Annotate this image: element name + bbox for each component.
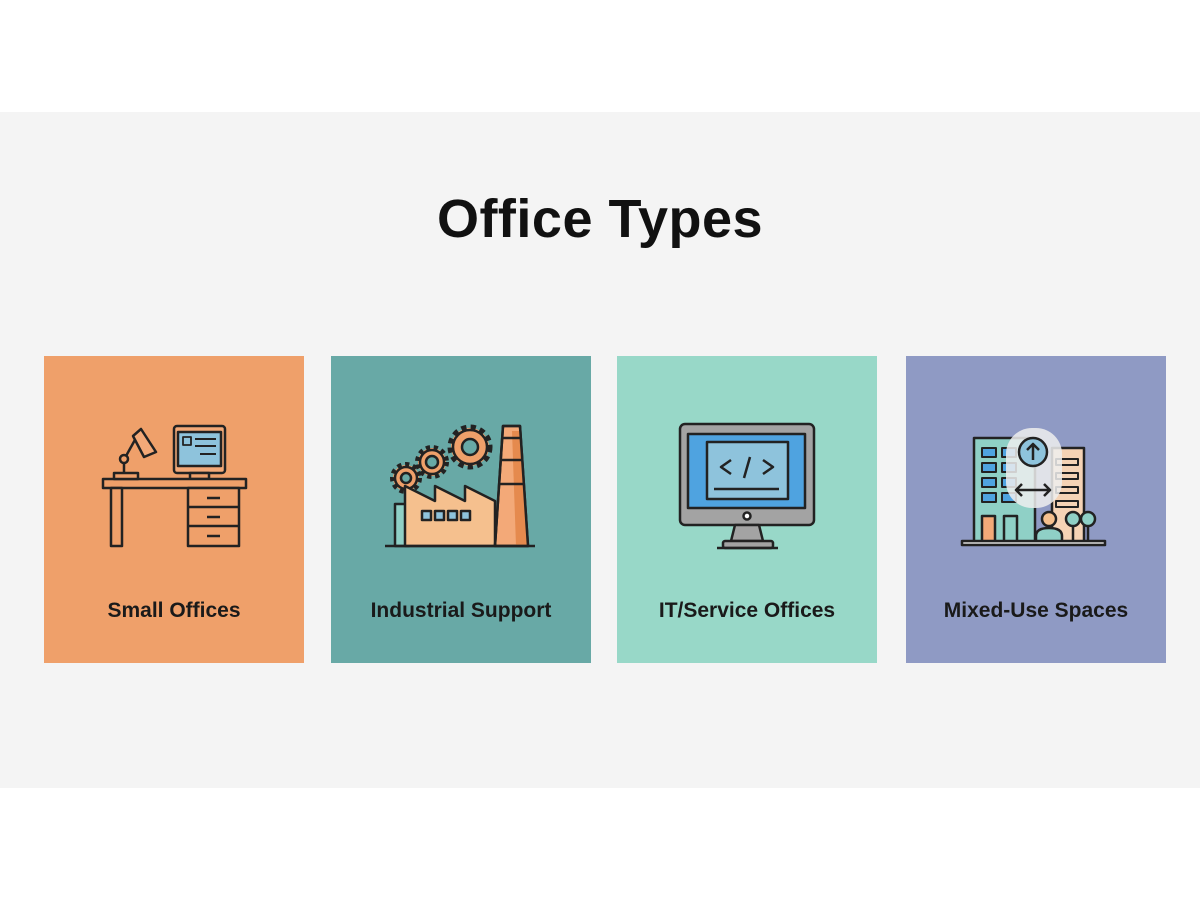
icon: mixed-use building xyxy=(960,428,1106,546)
label: Small Offices xyxy=(107,599,241,622)
label: Mixed-Use Spaces xyxy=(944,599,1128,622)
icon: desk with computer xyxy=(102,424,248,548)
panel: mixed-use spaces xyxy=(906,356,1166,663)
label: Industrial Support xyxy=(371,599,551,622)
icon: factory with gears xyxy=(385,424,535,548)
panel: small offices xyxy=(44,356,304,663)
panel: industrial support xyxy=(331,356,591,663)
label: IT/Service Offices xyxy=(659,599,835,622)
title: Office Types xyxy=(437,189,763,249)
icon: monitor with code xyxy=(678,422,816,550)
panel: IT/service offices xyxy=(617,356,877,663)
